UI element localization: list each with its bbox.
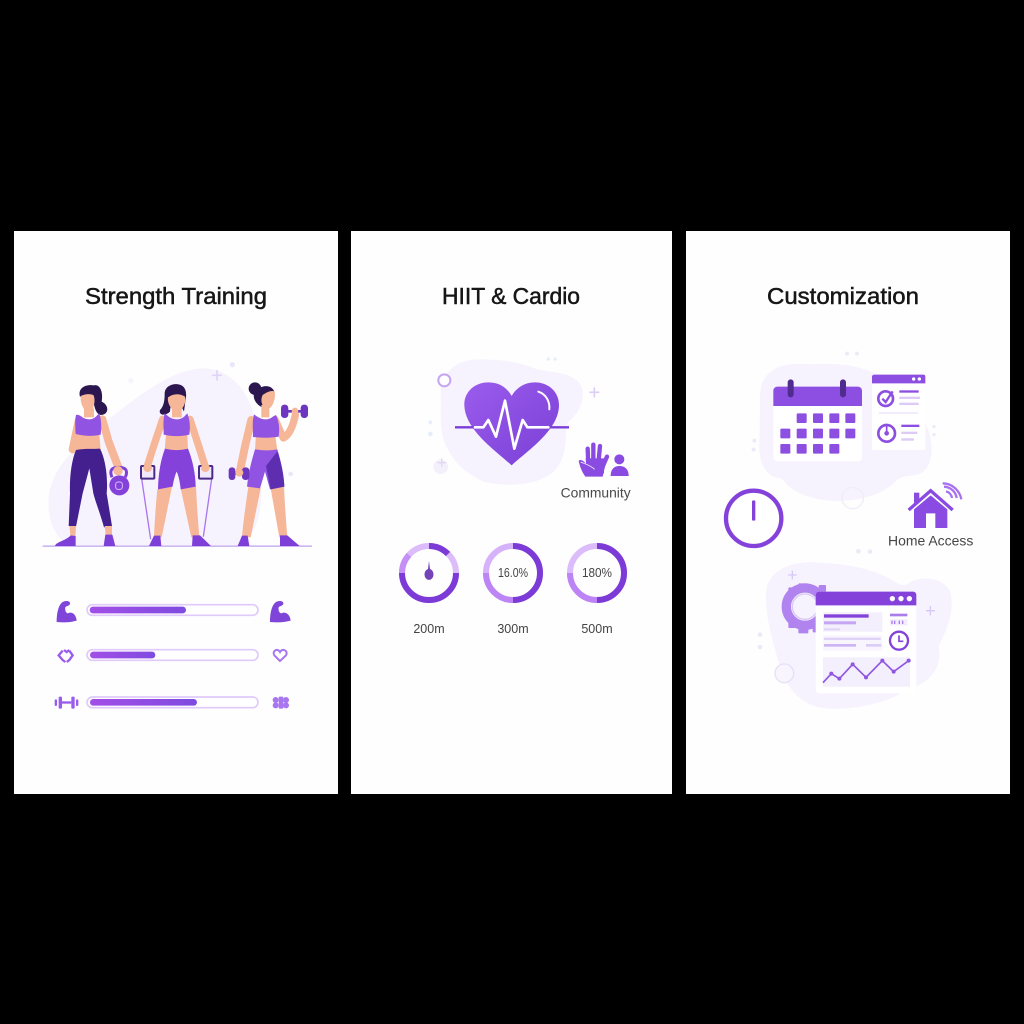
figure: woman with dumbbells bbox=[229, 382, 308, 546]
icon: home with wifi bbox=[909, 483, 961, 528]
icon: community hand and person bbox=[579, 445, 629, 477]
donut: 200m: 200m bbox=[413, 622, 445, 636]
donut: 300m: 300m bbox=[497, 622, 529, 636]
bar row: agility bbox=[59, 650, 287, 662]
icon: clock bbox=[726, 491, 781, 546]
figure: woman with kettlebell bbox=[55, 385, 129, 546]
icon: calendar bbox=[773, 379, 862, 461]
heading: HIIT and cardio: HIIT & Cardio bbox=[442, 283, 580, 309]
illustration: calendar, checklist, clock and home bbox=[726, 352, 974, 554]
icon: checklist card bbox=[872, 375, 925, 450]
donut: 200m bbox=[402, 546, 456, 636]
progress bars with icons bbox=[55, 601, 291, 709]
panel: strength training bbox=[14, 231, 338, 794]
donut: 500m: 500m bbox=[581, 622, 613, 636]
label: home access: Home Access bbox=[888, 534, 974, 549]
illustration: three women exercising bbox=[43, 362, 312, 547]
donut: 300m bbox=[486, 546, 540, 636]
bar row: weights bbox=[55, 697, 289, 709]
donut: 500m bbox=[570, 546, 624, 636]
illustration: dashboard window with gear bbox=[758, 550, 952, 709]
donut: 300m: 16.0% bbox=[498, 566, 528, 580]
donut: 500m: 180% bbox=[582, 566, 612, 580]
illustration: heart with pulse line bbox=[428, 357, 631, 501]
heading: strength training: Strength Training bbox=[85, 283, 267, 309]
bar row: arm strength bbox=[57, 601, 291, 622]
panel: HIIT and cardio bbox=[351, 231, 672, 794]
dashboard window bbox=[816, 592, 916, 693]
icon: gear bbox=[783, 583, 826, 633]
panel: customization bbox=[686, 231, 1010, 794]
label: community: Community bbox=[561, 486, 631, 501]
figure: woman with resistance bands bbox=[141, 384, 212, 546]
heading: customization: Customization bbox=[767, 283, 919, 309]
